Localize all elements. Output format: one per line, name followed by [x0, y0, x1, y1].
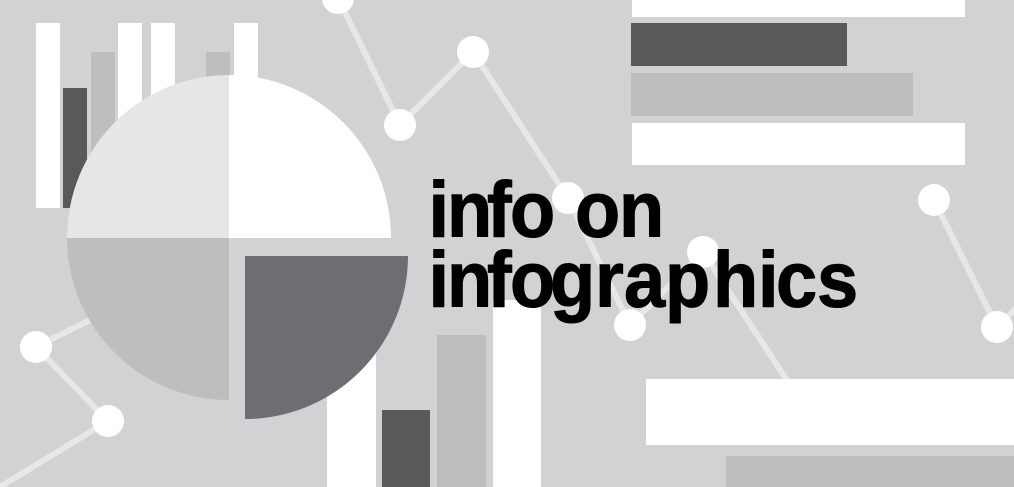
bar chart: top left vertical bars	[36, 23, 258, 208]
bar chart: bottom centre vertical bars	[327, 300, 541, 487]
line chart: right	[918, 184, 1014, 343]
pie slice: lower left	[67, 238, 229, 400]
title line 1: info on	[428, 167, 664, 254]
line chart: centre	[322, 0, 790, 385]
pie slice: upper right	[229, 75, 391, 238]
line chart: lower left	[0, 315, 124, 487]
bar chart: bottom right horizontal bars	[646, 379, 1014, 487]
title	[428, 167, 858, 324]
pie slice: offset lower right	[245, 256, 408, 419]
title line 2: infographics	[428, 237, 858, 324]
bar chart: top right horizontal bars	[631, 0, 965, 165]
pie slice: upper left	[67, 75, 229, 238]
pie chart	[67, 75, 408, 419]
